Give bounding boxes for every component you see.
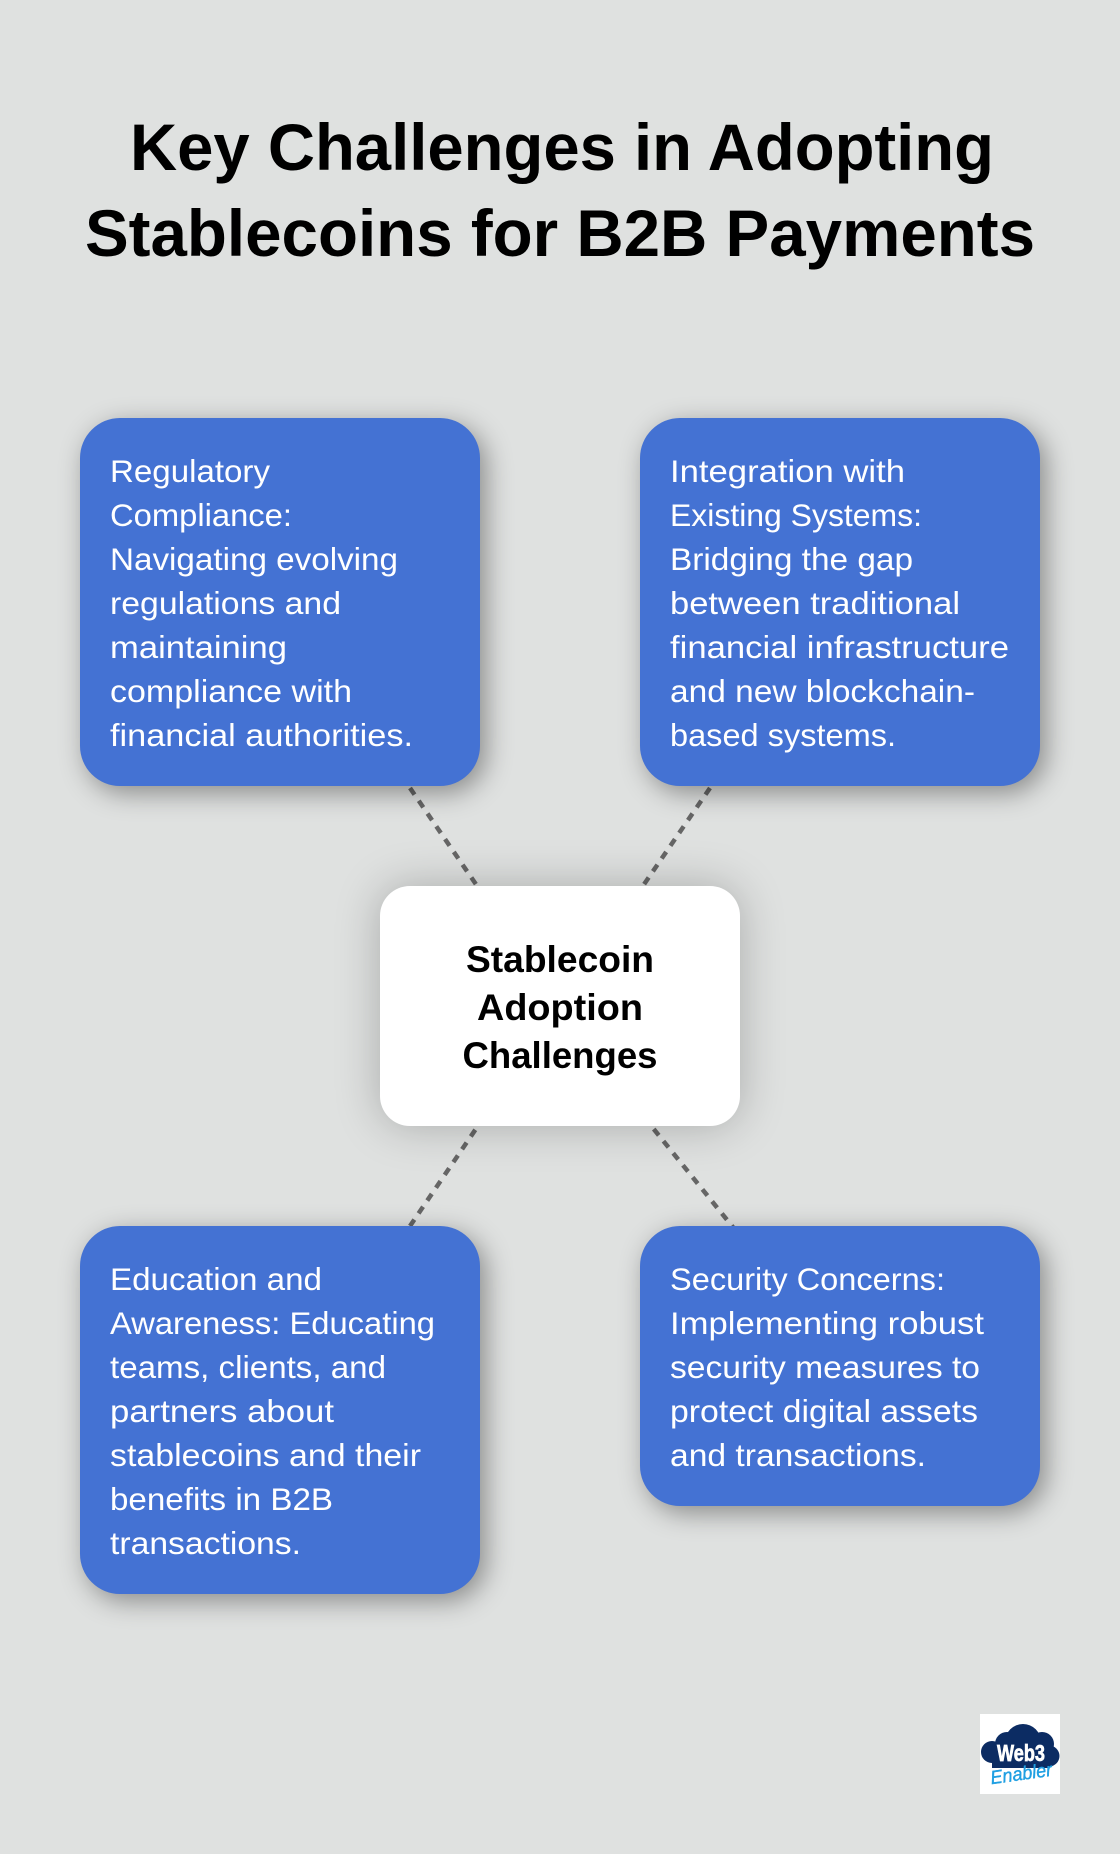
panel: regulatory compliance: Compliance: [110,497,292,533]
panel: center topic: Stablecoin [466,939,654,980]
connector: regulatory compliance to center [410,788,484,896]
panel: regulatory compliance: Navigating evolving [110,541,398,577]
panel: integration with existing systems: financial infrastructure [670,629,1009,665]
panel: regulatory compliance: compliance with [110,673,352,709]
panel: integration with existing systems: Integration with [670,453,905,489]
panel: center topic [380,886,740,1126]
panel: education and awareness: Awareness: Educating [110,1305,435,1341]
panel: regulatory compliance [80,418,480,786]
panel: center topic: Adoption [477,987,643,1028]
title [85,110,1035,270]
connector: security to center [644,1117,736,1231]
connector: integration to center [636,788,710,896]
icon: Web3 Enabler logo [980,1714,1060,1794]
panel: security concerns: Implementing robust [670,1305,984,1341]
panel: integration with existing systems: Bridging the gap [670,541,913,577]
panel: education and awareness: partners about [110,1393,334,1429]
panel: education and awareness: benefits in B2B [110,1481,333,1517]
panel: regulatory compliance: regulations and [110,585,341,621]
panel: integration with existing systems: Existing Systems: [670,497,922,533]
icon: Web3 Enabler logo: Web3 [997,1740,1045,1766]
icon: Web3 Enabler logo: Enabler [989,1760,1054,1789]
panel: security concerns: Security Concerns: [670,1261,945,1297]
title: Key Challenges in Adopting [130,110,994,184]
panel: security concerns: security measures to [670,1349,980,1385]
panel: security concerns: protect digital assets [670,1393,978,1429]
panel: center topic: Challenges [462,1035,658,1076]
panel: education and awareness: stablecoins and their [110,1437,421,1473]
panel: integration with existing systems: and new blockchain- [670,673,975,709]
panel: education and awareness: Education and [110,1261,322,1297]
panel: security concerns [640,1226,1040,1506]
panel: education and awareness: teams, clients, and [110,1349,386,1385]
panel: education and awareness [80,1226,480,1594]
panel: regulatory compliance: maintaining [110,629,287,665]
panel: education and awareness: transactions. [110,1525,301,1561]
connector: education to center [410,1117,484,1226]
panel: integration with existing systems: between traditional [670,585,960,621]
title: Stablecoins for B2B Payments [85,196,1035,270]
panel: integration with existing systems [640,418,1040,786]
panel: regulatory compliance: Regulatory [110,453,270,489]
panel: integration with existing systems: based systems. [670,717,896,753]
panel: regulatory compliance: financial authorities. [110,717,413,753]
panel: security concerns: and transactions. [670,1437,926,1473]
